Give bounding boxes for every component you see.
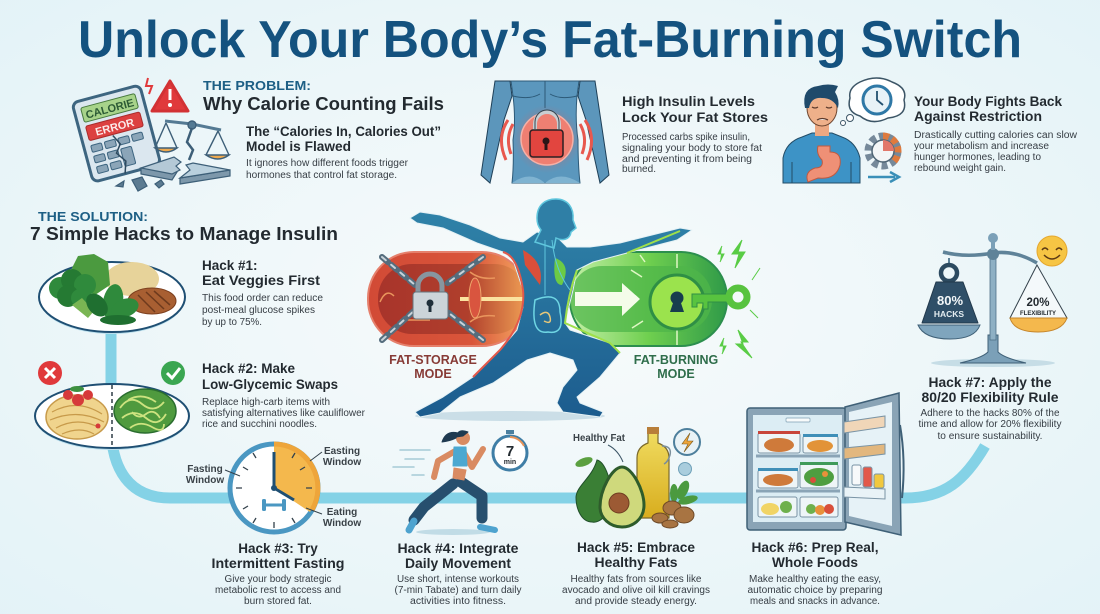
labels: clock windows: Easting <box>324 446 360 457</box>
text block: hack 4: Hack #4: Integrate <box>398 541 519 556</box>
text block: hack 2 <box>202 361 366 430</box>
text block: high insulin: Processed carbs spike insulin, <box>622 132 750 143</box>
icon: smiley <box>1037 236 1067 266</box>
text block: hack 2: Hack #2: Make <box>202 361 295 376</box>
text block: hack 7 <box>918 375 1062 442</box>
text block: hack 4 <box>394 541 522 607</box>
text block: hack 1: post-meal glucose spikes <box>202 305 315 316</box>
text block: calories in calories out: It ignores how different foods trigger <box>246 158 409 169</box>
text block: body fights back: Your Body Fights Back <box>914 94 1062 109</box>
icon: calculator: CALORIE <box>84 97 135 122</box>
text block: hack 4: Daily Movement <box>405 556 512 571</box>
text block: hack 1 <box>202 258 323 328</box>
icon: balance scale <box>155 121 229 160</box>
icon: open fridge with meals <box>747 393 904 535</box>
hack 5 <box>562 427 710 607</box>
illustration: human figure <box>410 199 692 421</box>
panel: fat-storage mode <box>368 252 528 346</box>
hack 3 <box>186 444 361 607</box>
text block: hack 3: Give your body strategic <box>224 574 332 585</box>
text block: body fights back: Drastically cutting calories can slow <box>914 130 1078 141</box>
labels: clock windows: Fasting <box>187 464 223 475</box>
label: fat-storage mode: MODE <box>414 367 452 381</box>
icon: 80/20 balance scale: 80% <box>937 293 963 308</box>
panel: body fights back <box>783 78 1078 183</box>
label: fat-burning mode: MODE <box>657 367 695 381</box>
icon: calculator <box>72 85 161 182</box>
heading: the solution: THE SOLUTION: <box>38 209 148 224</box>
text block: hack 4: Use short, intense workouts <box>397 574 519 585</box>
icon: swap plate <box>35 384 189 450</box>
labels: clock windows <box>186 446 361 529</box>
text block: hack 6: meals and snacks in advance. <box>750 596 880 607</box>
icon: glowing keyhole <box>650 275 704 329</box>
text block: hack 7: 80/20 Flexibility Rule <box>922 390 1059 405</box>
icon: 7-minute stopwatch: min <box>504 459 516 466</box>
labels: clock windows: Eating <box>327 507 357 518</box>
hack 2 <box>35 361 366 450</box>
label: fat-burning mode: FAT-BURNING <box>634 353 718 367</box>
icon: 80/20 balance scale <box>918 233 1067 367</box>
text block: hack 3 <box>212 541 344 607</box>
icon: broken calculator and scale <box>72 78 230 191</box>
heading: 7 simple hacks: 7 Simple Hacks to Manage Insulin <box>30 224 338 244</box>
icon: cracked slab <box>116 157 230 191</box>
text block: hack 2: rice and succhini noodles. <box>202 419 317 430</box>
text block: calories in calories out: hormones that control fat storage. <box>246 170 397 181</box>
center illustration: fat-storage vs fat-burning <box>368 199 760 421</box>
text block: hack 5 <box>562 540 710 607</box>
text block: body fights back: hunger hormones, leading to <box>914 152 1041 163</box>
hack 4 <box>393 430 527 607</box>
icon: plate with veggies <box>39 254 185 334</box>
text block: hack 4: (7-min Tabate) and turn daily <box>394 585 522 596</box>
icon: 80/20 balance scale: HACKS <box>934 309 964 319</box>
icon: torso with red lock <box>481 81 609 183</box>
text block: hack 3: Intermittent Fasting <box>212 556 344 571</box>
text block: hack 7: Adhere to the hacks 80% of the <box>920 408 1060 419</box>
text block: hack 5: Hack #5: Embrace <box>577 540 695 555</box>
text block: calories in calories out: Model is Flawed <box>246 139 351 154</box>
icon: tired person with clock and gear <box>783 78 905 183</box>
text block: hack 2: Low-Glycemic Swaps <box>202 377 338 392</box>
icon: 7-minute stopwatch: 7 <box>506 443 514 460</box>
text block: high insulin: signaling your body to store fat <box>622 143 762 154</box>
title: Unlock Your Body’s Fat-Burning Switch <box>78 11 1022 69</box>
text block: hack 7: Hack #7: Apply the <box>928 375 1052 390</box>
text block: hack 3: Hack #3: Try <box>238 541 318 556</box>
labels: clock windows: Window <box>323 518 361 529</box>
text block: hack 1: by up to 75%. <box>202 317 262 328</box>
heading: the problem: THE PROBLEM: <box>203 78 311 93</box>
text block: hack 6: automatic choice by preparing <box>748 585 882 596</box>
hack 1 <box>39 254 323 334</box>
icon: avocado, olive oil, nuts <box>574 427 700 528</box>
icon: green check badge <box>161 361 185 385</box>
text block: hack 1: This food order can reduce <box>202 293 323 304</box>
text block: hack 7: time and allow for 20% flexibility <box>918 419 1062 430</box>
text block: hack 3: metabolic rest to access and <box>215 585 341 596</box>
text block: hack 6 <box>748 540 882 607</box>
text block: hack 6: Make healthy eating the easy, <box>749 574 881 585</box>
labels: clock windows: Window <box>186 475 224 486</box>
connector path between hacks <box>111 330 985 498</box>
text block: body fights back <box>914 94 1078 174</box>
hack 7 <box>918 233 1067 442</box>
text block: hack 5: and provide steady energy. <box>575 596 697 607</box>
text block: body fights back: rebound weight gain. <box>914 163 1006 174</box>
text block: high insulin <box>622 94 768 175</box>
text block: hack 6: Whole Foods <box>772 555 858 570</box>
text block: calories in calories out: The “Calories In, Calories Out” <box>246 124 441 139</box>
text block: high insulin: burned. <box>622 164 656 175</box>
icon: 80/20 balance scale: FLEXIBILITY <box>1020 311 1056 317</box>
panel: high insulin <box>481 81 768 183</box>
text block: high insulin: Lock Your Fat Stores <box>622 110 768 125</box>
icon: energy bolts <box>718 240 760 358</box>
text block: hack 5: Healthy Fats <box>594 555 678 570</box>
icon: 7-minute stopwatch <box>493 430 527 470</box>
icon: chains <box>382 257 483 340</box>
icon: warning triangle <box>146 78 188 111</box>
text block: hack 5: Healthy fats from sources like <box>570 574 702 585</box>
text block: hack 2: Replace high-carb items with <box>202 397 330 408</box>
icon: calculator: ERROR <box>94 117 136 139</box>
label: fat-storage mode: FAT-STORAGE <box>389 353 477 367</box>
text block: hack 1: Hack #1: <box>202 258 258 273</box>
icon: runner <box>393 431 495 535</box>
icon: fasting clock <box>230 444 318 532</box>
icon: key <box>692 288 747 309</box>
icon: padlock <box>413 274 448 319</box>
label: healthy fat: Healthy Fat <box>573 433 626 444</box>
text block: hack 2: satisfying alternatives like cauliflower <box>202 408 366 419</box>
text block: hack 3: burn stored fat. <box>244 596 312 607</box>
text block: hack 1: Eat Veggies First <box>202 273 321 288</box>
text block: body fights back: your metabolism and increase <box>914 141 1049 152</box>
panel: fat-burning mode <box>570 240 760 358</box>
labels: clock windows: Window <box>323 457 361 468</box>
text block: hack 6: Hack #6: Prep Real, <box>752 540 878 555</box>
hack 6 <box>747 393 904 607</box>
text block: hack 7: to ensure sustainability. <box>938 431 1042 442</box>
body head <box>535 199 576 248</box>
icon: 80/20 balance scale: 20% <box>1026 297 1050 309</box>
heading: why calorie counting fails: Why Calorie Counting Fails <box>203 93 444 114</box>
text block: hack 4: activities into fitness. <box>410 596 506 607</box>
panel: the problem <box>72 78 444 191</box>
icon: red x badge <box>38 361 62 385</box>
text block: high insulin: and preventing it from being <box>622 154 752 165</box>
text block: calories in calories out <box>246 124 441 181</box>
text block: high insulin: High Insulin Levels <box>622 94 755 109</box>
text block: body fights back: Against Restriction <box>914 109 1042 124</box>
text block: hack 5: avocado and olive oil kill cravings <box>562 585 710 596</box>
